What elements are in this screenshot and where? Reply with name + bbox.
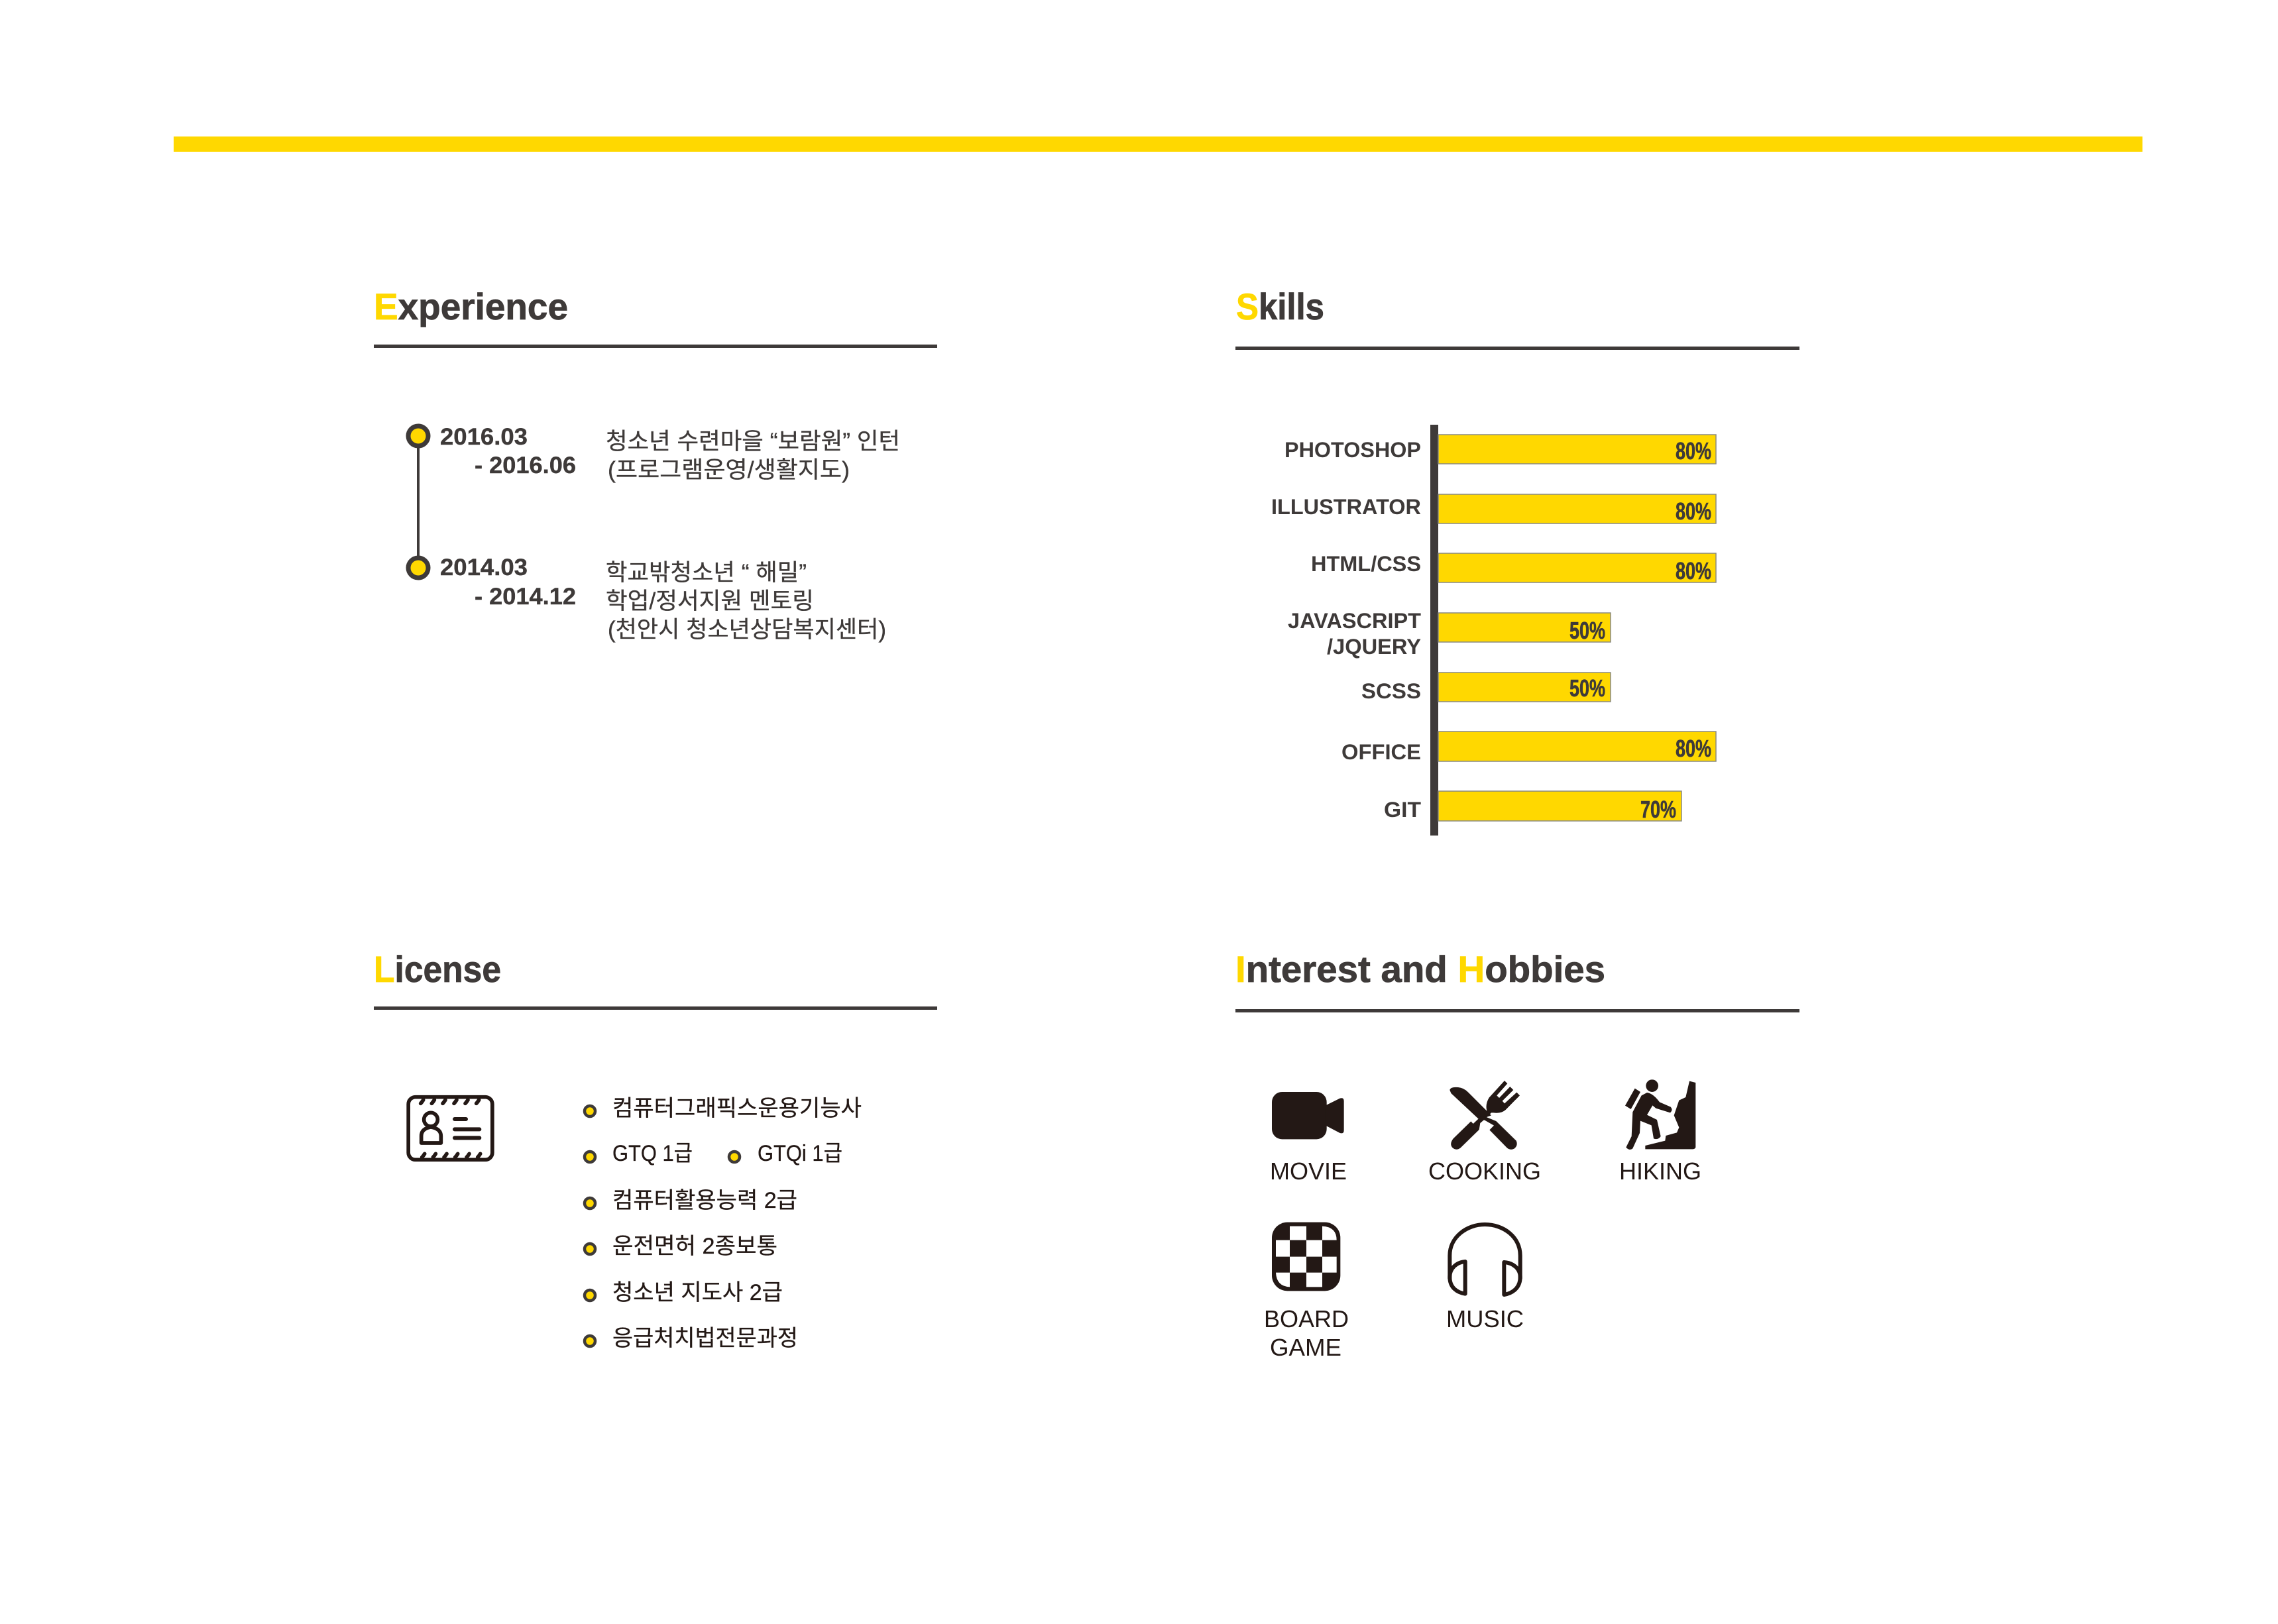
hobby: board game: [1264, 1222, 1349, 1361]
license item 5: 운전면허 2종보통: [612, 1234, 777, 1259]
icon: headphones: [1450, 1224, 1520, 1295]
board game label: [1264, 1305, 1349, 1361]
license item 3: GTQi 1급: [758, 1141, 842, 1166]
hobbies heading rule: [1235, 1009, 1799, 1012]
skill: illustrator: ILLUSTRATOR: [1271, 495, 1421, 519]
icon: video camera: [1272, 1092, 1344, 1139]
license item 2: GTQ 1급: [612, 1141, 693, 1166]
entry 2014 dates: 2014.03: [440, 555, 528, 580]
skill: illustrator: 80%: [1676, 498, 1711, 525]
skills heading rule: [1235, 347, 1799, 350]
entry 2016 dates: - 2016.06: [475, 453, 576, 478]
hobby: cooking: COOKING: [1428, 1158, 1541, 1185]
timeline: [408, 426, 428, 578]
entry 2016 description: [606, 429, 900, 483]
hobby: music: [1446, 1224, 1524, 1332]
board game label: BOARD: [1264, 1305, 1349, 1332]
entry 2016 dates: 2016.03: [440, 424, 528, 450]
chart axis: [1430, 425, 1438, 836]
top yellow banner bar: [174, 136, 2142, 152]
skill: javascript/jquery: JAVASCRIPT: [1288, 609, 1421, 633]
hobby: hiking: [1619, 1079, 1701, 1185]
skill: html/css: [1311, 552, 1716, 584]
entry 2016 description: 청소년 수련마을 “보람원” 인턴: [606, 429, 900, 455]
heading: License: License: [374, 948, 501, 990]
license heading rule: [374, 1006, 937, 1010]
skill: git: 70%: [1640, 796, 1676, 823]
skill: scss: 50%: [1569, 675, 1605, 702]
skill: javascript/jquery: /JQUERY: [1327, 635, 1421, 659]
skill: scss: [1361, 673, 1611, 703]
entry 2014 dates: - 2014.12: [475, 584, 576, 610]
panel: skills: [1235, 286, 1799, 836]
skill: javascript/jquery: 50%: [1569, 617, 1605, 644]
panel: experience: [374, 286, 937, 643]
entry 2016 dates: [440, 424, 576, 478]
skill: git: GIT: [1384, 798, 1421, 822]
entry 2014 description: 학교밖청소년 “ 해밀”: [606, 560, 807, 586]
skill: illustrator: [1271, 494, 1716, 525]
heading: Skills: Skills: [1236, 286, 1324, 327]
bar chart: [1271, 425, 1716, 836]
entry 2014 description: [606, 560, 886, 643]
skill: office: OFFICE: [1341, 740, 1421, 764]
skill: photoshop: [1284, 435, 1716, 464]
hobby: music: MUSIC: [1446, 1305, 1524, 1332]
icon: id card: [408, 1097, 492, 1160]
heading: Experience: Experience: [374, 286, 568, 327]
license item 6: 청소년 지도사 2급: [612, 1280, 783, 1305]
entry 2014 description: (천안시 청소년상담복지센터): [608, 617, 886, 643]
license item 2: [585, 1141, 693, 1166]
icon: knife and fork: [1450, 1081, 1520, 1150]
hobby: hiking: HIKING: [1619, 1158, 1701, 1185]
icon: hiker climbing: [1625, 1079, 1695, 1150]
license item 1: 컴퓨터그래픽스운용기능사: [612, 1096, 862, 1121]
skill: html/css: HTML/CSS: [1311, 552, 1421, 576]
panel: license: [374, 948, 937, 1351]
heading: Interest and Hobbies: Interest and Hobbies: [1235, 948, 1605, 990]
license list: [585, 1096, 862, 1351]
skill: photoshop: 80%: [1676, 437, 1711, 464]
license item 4: 컴퓨터활용능력 2급: [612, 1188, 797, 1213]
skill: git: [1384, 791, 1681, 823]
entry 2014 description: 학업/정서지원 멘토링: [606, 588, 814, 614]
skill: office: [1341, 731, 1716, 764]
skill: scss: SCSS: [1361, 679, 1421, 703]
board game label: GAME: [1270, 1334, 1341, 1361]
entry 2016 description: (프로그램운영/생활지도): [608, 457, 850, 483]
skill: html/css: 80%: [1676, 557, 1711, 584]
experience heading rule: [374, 345, 937, 348]
hobby: cooking: [1428, 1081, 1541, 1185]
icon: checker board: [1272, 1222, 1340, 1291]
hobby: movie: [1270, 1092, 1347, 1185]
entry 2014 dates: [440, 555, 576, 610]
panel: interest and hobbies: [1235, 948, 1799, 1361]
skill: office: 80%: [1676, 735, 1711, 762]
license item 7: 응급처치법전문과정: [612, 1326, 798, 1351]
hobby: movie: MOVIE: [1270, 1158, 1347, 1185]
skill: javascript/jquery: [1288, 609, 1611, 659]
skill: photoshop: PHOTOSHOP: [1284, 438, 1421, 462]
license item 3: [729, 1141, 842, 1166]
